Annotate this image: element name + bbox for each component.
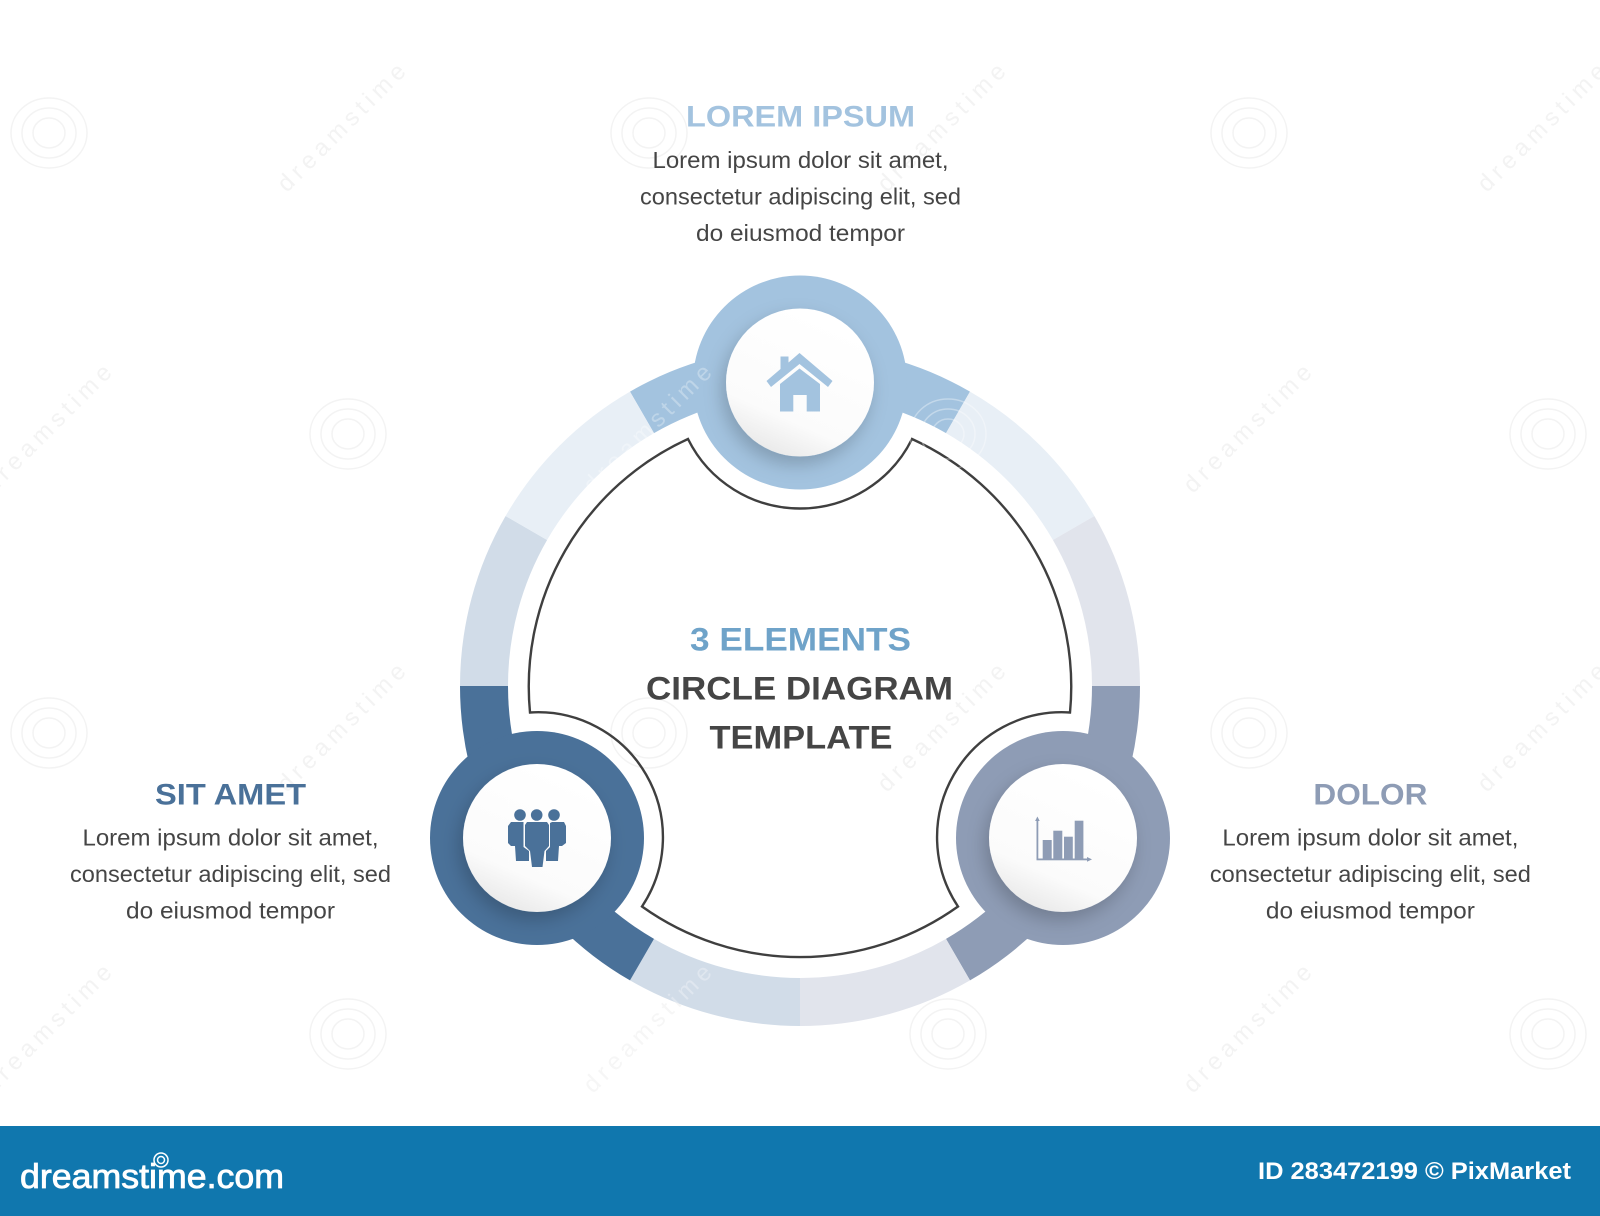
watermark pattern: dreamstime	[872, 658, 1011, 797]
text block: lorem ipsum (top): do eiusmod tempor	[696, 220, 905, 246]
center title: TEMPLATE	[710, 720, 892, 756]
text block: lorem ipsum (top): Lorem ipsum dolor sit amet,	[652, 147, 948, 173]
text block: dolor (right): DOLOR	[1313, 778, 1428, 811]
watermark over diagram	[578, 359, 986, 1098]
circle diagram	[430, 276, 1170, 1026]
text block: lorem ipsum (top): LOREM IPSUM	[686, 101, 915, 134]
text block: sit amet (left): do eiusmod tempor	[126, 898, 335, 924]
node: bottom left	[430, 731, 644, 945]
watermark pattern: dreamstime	[272, 58, 411, 197]
text block: sit amet (left)	[70, 778, 391, 924]
node: top	[693, 276, 907, 490]
text block: dolor (right): do eiusmod tempor	[1266, 898, 1475, 924]
text block: lorem ipsum (top): consectetur adipiscing elit, sed	[640, 184, 961, 210]
node: bottom right	[956, 731, 1170, 945]
watermark pattern: dreamstime	[1178, 959, 1317, 1098]
center title	[646, 622, 953, 756]
footer credit: ID 283472199 © PixMarket	[1258, 1158, 1571, 1185]
center title: CIRCLE DIAGRAM	[646, 670, 953, 706]
inner outline	[529, 439, 1071, 957]
watermark pattern: dreamstime	[1178, 359, 1317, 498]
text block: dolor (right)	[1210, 778, 1531, 924]
text block: sit amet (left): consectetur adipiscing elit, sed	[70, 861, 391, 887]
text block: sit amet (left): Lorem ipsum dolor sit amet,	[82, 825, 378, 851]
text block: lorem ipsum (top)	[640, 101, 961, 246]
icon: bar chart	[1035, 816, 1092, 862]
watermark pattern: dreamstime	[272, 658, 411, 797]
watermark over diagram: dreamstime	[578, 959, 717, 1098]
center title: 3 ELEMENTS	[690, 622, 911, 658]
watermark pattern: dreamstime	[872, 58, 1011, 197]
footer logo: dreamstime.com	[20, 1158, 284, 1196]
watermark over diagram: dreamstime	[578, 359, 717, 498]
footer logo spiral	[154, 1153, 168, 1167]
text block: dolor (right): Lorem ipsum dolor sit amet,	[1222, 825, 1518, 851]
footer bar	[0, 1126, 1600, 1216]
text block: sit amet (left): SIT AMET	[155, 778, 306, 811]
watermark pattern: dreamstime	[578, 959, 717, 1098]
icon: house	[766, 353, 832, 412]
ring segments	[460, 346, 1140, 1026]
text block: dolor (right): consectetur adipiscing elit, sed	[1210, 861, 1531, 887]
icon: people	[508, 809, 566, 867]
